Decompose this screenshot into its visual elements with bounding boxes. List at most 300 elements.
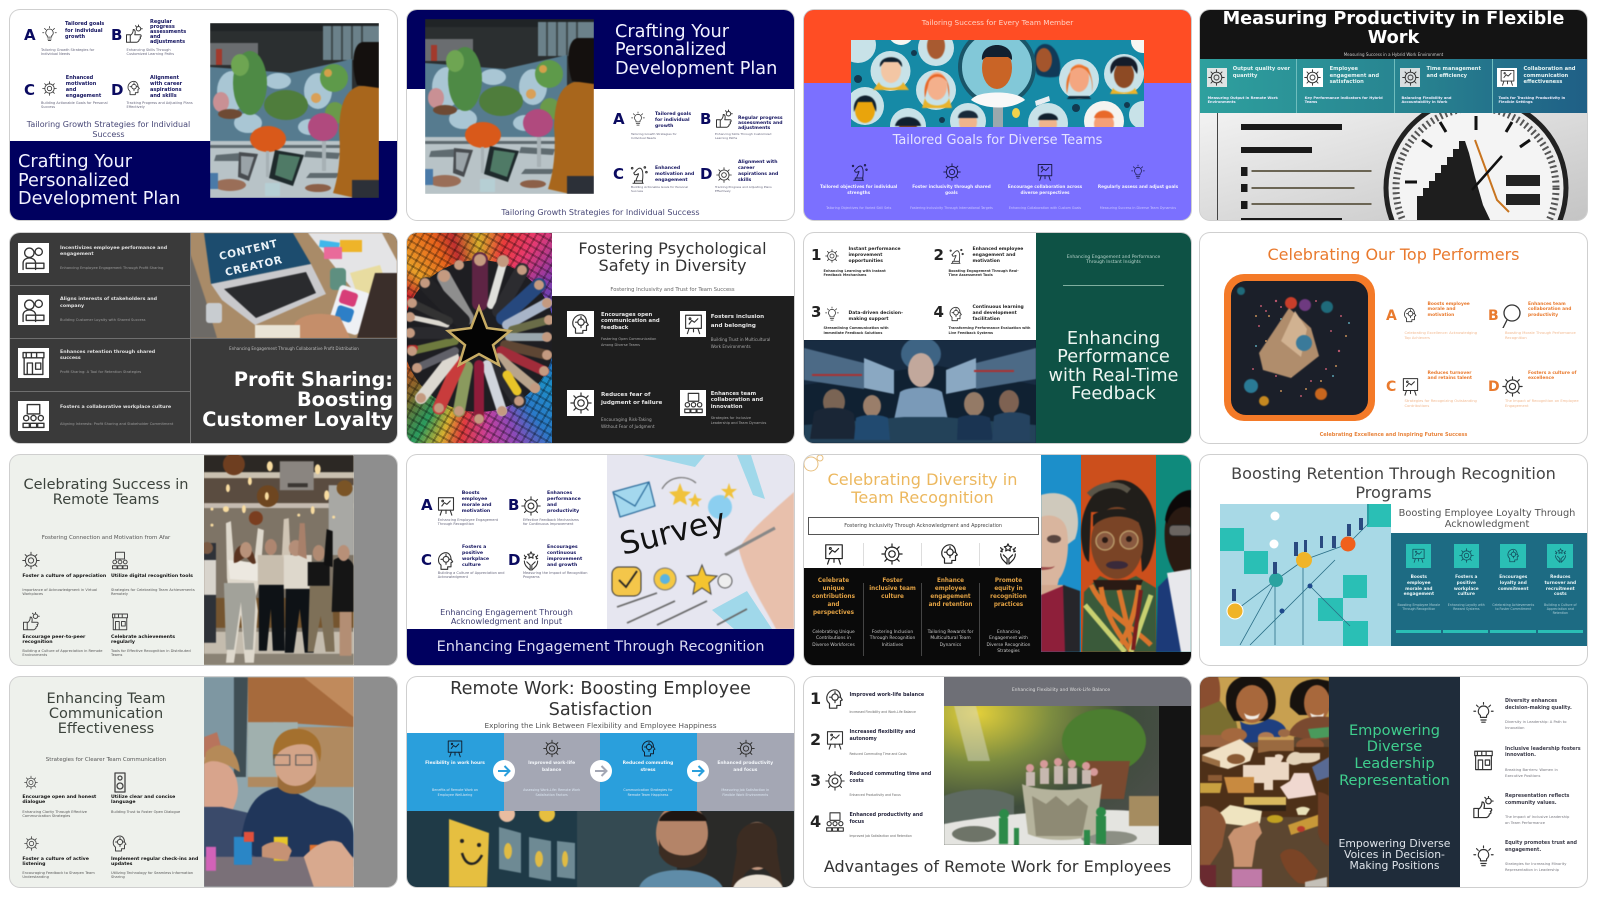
item A: Tailoring Growth Strategies for — [41, 48, 94, 52]
metric 3: and efficiency — [1426, 73, 1467, 79]
title — [1223, 10, 1564, 48]
item 2: Increased flexibility and — [850, 729, 915, 735]
subtitle: Acknowledgment — [1445, 519, 1529, 530]
icon: gear — [1502, 376, 1523, 396]
icon: gears — [1459, 548, 1474, 563]
column 4: Enhanced productivity — [717, 761, 773, 766]
icon: target gear — [943, 163, 961, 181]
item 4 — [810, 811, 940, 839]
column 2: goals — [945, 190, 958, 195]
item 3: 3 — [810, 771, 821, 790]
item 2: Enhanced employee — [972, 246, 1023, 252]
band title: Enhancing Engagement Through Recognition — [437, 639, 764, 655]
title: Enhancing Team — [47, 690, 165, 706]
photo: woman in helmet with holographic screens — [804, 340, 1036, 442]
item 1: 1 — [810, 689, 821, 708]
item B — [508, 491, 593, 529]
subtitle: Enhancing Engagement Through — [440, 606, 573, 616]
icon: gears — [543, 739, 561, 758]
item 3: Representation reflects — [1505, 793, 1569, 799]
column 1: employee — [1407, 581, 1431, 586]
item 1: Foster a culture of appreciation — [22, 574, 106, 578]
icon: lightbulb — [631, 112, 645, 126]
panel: Enhancing Performance with Real-Time Feedback — [804, 232, 1191, 442]
item 1 — [810, 691, 940, 717]
item 2: Reduced Commuting Time and Costs — [850, 752, 907, 756]
item B — [111, 19, 186, 56]
icon: easel — [682, 313, 704, 335]
item A: Individual Needs — [631, 136, 656, 140]
title: Celebrating Success in — [24, 476, 188, 492]
item C: and retains talent — [1428, 376, 1472, 381]
item 2: innovation. — [1505, 752, 1536, 758]
title — [18, 152, 180, 209]
icon: easel — [825, 730, 845, 750]
item 3: 3 — [811, 303, 821, 321]
item 2 — [810, 729, 940, 757]
item B: and — [150, 34, 161, 40]
item C: culture — [462, 563, 481, 568]
column 2: Reward Systems — [1453, 607, 1480, 611]
item D: Alignment with — [738, 160, 778, 165]
item A: growth — [65, 34, 85, 40]
item 4: Celebrate achievements — [111, 634, 175, 640]
title: Remote Teams — [53, 492, 159, 508]
item 3 — [810, 304, 910, 336]
item D: with career — [150, 81, 182, 87]
item C: Fosters a — [462, 545, 486, 550]
title: Enhancing — [1067, 328, 1160, 349]
item C: positive — [462, 551, 483, 556]
icon: magnifier — [1502, 304, 1523, 328]
title: Programs — [1355, 482, 1432, 502]
icon: head gear — [436, 550, 456, 572]
item 4 — [111, 833, 193, 883]
item 4: Representation in Leadership — [1505, 868, 1559, 872]
column 2 — [910, 163, 993, 210]
column 2: positive — [1457, 581, 1476, 586]
item 3: Foster a culture of active — [22, 856, 89, 862]
title: Customer Loyalty — [202, 408, 393, 431]
icon: chess knight — [948, 246, 964, 266]
subtitle: Fostering Inclusivity and Trust for Team Success — [610, 286, 735, 292]
column 4: equity in — [994, 586, 1023, 592]
column 4: Reduces — [1550, 575, 1570, 580]
item B — [700, 110, 783, 140]
column 1: perspectives — [813, 610, 854, 616]
title: Remote Work: Boosting Employee — [450, 679, 751, 699]
icon: lightbulb — [1473, 845, 1494, 868]
photo: survey paper and hand — [607, 455, 794, 629]
title: Crafting Your — [18, 152, 132, 172]
panel: Advantages of Remote Work for Employees — [804, 677, 1191, 887]
column 4 — [1098, 164, 1178, 210]
title: Celebrating Diversity in — [828, 470, 1017, 488]
column 4: Engagement with — [989, 636, 1028, 641]
item 3: Environments — [22, 653, 47, 657]
column 4: Promote — [995, 578, 1022, 584]
column 1: Boosts — [1411, 575, 1427, 580]
item B: Enhancing Skills Through — [126, 48, 171, 52]
item 2: Inclusive leadership fosters — [1505, 746, 1581, 752]
icon: speaker — [113, 772, 127, 793]
teal panel — [1391, 533, 1587, 646]
item B — [1487, 300, 1573, 342]
icon: gears — [1402, 69, 1419, 86]
metric 1: quantity — [1233, 73, 1257, 79]
metric 2: Employee — [1330, 66, 1358, 72]
item B: Enhancing Skills Through Customized — [715, 132, 771, 136]
item 4: Transforming Performance Evaluation with — [948, 326, 1030, 330]
item D: Tracking Progress and Adjusting Plans — [126, 101, 193, 105]
column 3: employee — [935, 586, 966, 592]
column 2: Satisfaction Factors — [535, 793, 568, 797]
item 4: Strategies for Increasing Minority — [1505, 862, 1566, 866]
column 4: Measuring Success in Diverse Team Dynamics — [1100, 206, 1176, 210]
metric 4: Flexible Settings — [1498, 100, 1533, 104]
item A: A — [24, 26, 36, 44]
item 4: Sharing — [111, 875, 125, 879]
item B: B — [700, 110, 711, 128]
column 3: Encourage collaboration across — [1008, 184, 1082, 189]
item D: The Impact of Recognition on Employee — [1505, 399, 1579, 403]
title — [804, 470, 1041, 508]
item C: Success — [631, 189, 643, 193]
panel: Enhancing Engagement Through Recognition — [407, 455, 794, 665]
column 3: Multicultural Team — [930, 636, 971, 641]
item B: Regular — [150, 19, 172, 25]
item 1: Increased Flexibility and Work-Life Balance — [850, 710, 916, 714]
item A: Boosts — [462, 491, 480, 496]
black header — [1200, 10, 1587, 59]
column 2: culture — [1458, 592, 1475, 597]
column 1: Benefits of Remote Work on — [432, 788, 478, 792]
title: Diverse — [1367, 738, 1422, 755]
item 3: making support — [848, 317, 889, 322]
item D: continuous — [547, 551, 576, 556]
item 3: Reduced commuting time and — [850, 770, 931, 776]
item 1: Encourages open — [601, 312, 652, 318]
item C — [613, 165, 694, 193]
column 1: Contributions in — [816, 636, 851, 641]
item C: engagement — [655, 178, 688, 183]
item 3: Streamlining Communication with — [824, 326, 888, 330]
icon: easel — [446, 739, 464, 758]
item A: motivation — [1428, 313, 1454, 318]
icon: head gear — [640, 739, 658, 758]
title — [1036, 330, 1191, 404]
item 4: engagement. — [1505, 847, 1541, 853]
photo: productivity chart and clock — [1200, 113, 1587, 220]
item 2: Executive Positions — [1505, 774, 1540, 778]
subtitle: Success — [92, 130, 125, 139]
item C: workplace — [462, 557, 489, 562]
item C: Building Actionable Goals for Personal — [41, 101, 108, 105]
photo: content creator laptop desk: CONTENT — [218, 237, 279, 262]
title: Team Recognition — [851, 488, 994, 507]
metric 4: communication — [1524, 73, 1568, 79]
item C: Reduces turnover — [1428, 370, 1471, 376]
item A: Tailored goals — [655, 112, 691, 117]
item 1: Communication Strategies — [22, 814, 70, 818]
column 2 — [1444, 543, 1491, 633]
title: Celebrating Our Top Performers — [1268, 244, 1520, 264]
item 2 — [932, 246, 1032, 278]
title — [10, 478, 202, 508]
title: Advantages of Remote Work for Employees — [824, 857, 1171, 876]
metric 3 — [1395, 59, 1493, 113]
title: Empowering — [1349, 722, 1440, 739]
panel: Tailored Goals for Diverse Teams — [804, 10, 1191, 220]
item 1: feedback — [601, 325, 628, 331]
grey header band — [944, 677, 1191, 706]
navy header band — [407, 10, 794, 89]
column 3: engagement — [930, 594, 971, 600]
item B: Customized Learning Paths — [126, 52, 174, 56]
item 1: Workplaces — [22, 592, 43, 596]
column 1: Through Recognition — [1402, 607, 1435, 611]
item 3: The Impact of Inclusive Leadership — [1505, 815, 1569, 819]
title: Development Plan — [615, 59, 777, 79]
column 2: Assessing Work-Life: Remote Work — [523, 788, 580, 792]
item A: Individual Needs — [41, 52, 70, 56]
item 3: recognition — [22, 640, 53, 645]
footer: Celebrating Excellence and Inspiring Future Success — [1320, 432, 1467, 438]
title — [407, 679, 794, 721]
subtitle: Acknowledgment and Input — [451, 616, 562, 626]
subtitle — [1391, 508, 1583, 531]
item D: Measuring the Impact of Recognition — [523, 571, 588, 575]
item C: Success — [41, 105, 55, 109]
icon: people board — [111, 550, 129, 571]
column 1: unique — [822, 586, 845, 592]
icon: clock gears — [521, 496, 541, 516]
column 4: practices — [994, 602, 1023, 608]
icon: head gear — [948, 304, 964, 324]
row 2: Aligns interests of stakeholders and — [60, 297, 157, 302]
item D: Effectively — [715, 189, 731, 193]
black lower panel — [804, 568, 1191, 665]
dark lower panel — [552, 296, 794, 442]
item 4: 4 — [810, 812, 821, 831]
item B: assessments and — [738, 120, 783, 126]
item 2: Building Trust to Foster Open Dialogue — [111, 810, 180, 814]
item A: A — [613, 110, 625, 128]
item A: morale and — [462, 503, 492, 508]
grey right strip — [354, 455, 397, 665]
item 4 — [1471, 840, 1583, 874]
item 2: Boosting Engagement Through Real- — [948, 269, 1019, 273]
subtitle box — [808, 517, 1039, 535]
item D: D — [1488, 378, 1500, 394]
metric 4: Tools for Tracking Productivity in — [1498, 96, 1565, 100]
item D: aspirations and — [738, 172, 778, 177]
item D: Encourages — [547, 545, 578, 550]
subtitle: Fostering Connection and Motivation from Afar — [42, 535, 170, 541]
row 3: Enhances retention through shared — [60, 350, 155, 354]
item C — [24, 75, 108, 109]
item D: career — [738, 166, 755, 171]
item C: Contributions — [1404, 404, 1429, 408]
icon: graduate head — [128, 80, 140, 96]
panel: Empowering Diverse Leadership Representation — [1200, 677, 1587, 887]
item 2: Building Trust in Multicultural — [711, 337, 770, 342]
metric 1: Measuring Output in Remote Work — [1208, 96, 1278, 100]
column 3: and retention — [929, 602, 972, 608]
item A: Top Achievers — [1404, 336, 1430, 340]
column 1: Celebrate — [818, 578, 849, 584]
icon: easel — [823, 542, 845, 566]
item 1: communication and — [601, 318, 660, 324]
panel: Celebrating Success in Remote Teams — [10, 455, 397, 665]
item 2: Work Environments — [711, 344, 751, 348]
item B: progress — [150, 24, 175, 30]
item 4: Improved Job Satisfaction and Retention — [850, 834, 912, 838]
item 3 — [22, 611, 104, 659]
panel: Celebrating Our Top Performers — [1200, 232, 1587, 442]
title — [202, 370, 393, 430]
item 1: dialogue — [22, 800, 45, 805]
item 4: Equity promotes trust and — [1505, 840, 1577, 846]
title: Satisfaction — [549, 700, 652, 720]
arrow 3 — [686, 759, 710, 783]
column 4 — [697, 733, 794, 811]
item A: Tailored goals — [65, 21, 104, 27]
column 3: Remote Team Happiness — [628, 793, 668, 797]
row 3: success — [60, 356, 81, 361]
item 1: Fostering Open Communication — [601, 337, 656, 341]
column 1 — [820, 164, 897, 210]
column 3: loyalty and — [1500, 581, 1527, 586]
item D: aspirations — [150, 87, 182, 93]
item A — [421, 491, 506, 529]
icon: people at desk — [22, 247, 45, 270]
arrow 2 — [588, 759, 612, 783]
item D: Programs — [523, 575, 540, 579]
item B: Learning Paths — [715, 136, 737, 140]
photo: digital garden and woman — [425, 19, 594, 194]
item A: for individual — [655, 118, 690, 123]
column 4: Diverse Recognition — [987, 643, 1030, 648]
item 3: community values. — [1505, 800, 1557, 806]
column 2: Through Recognition — [870, 636, 915, 641]
icon: easel — [1401, 374, 1420, 398]
icon: easel — [436, 496, 456, 516]
decorative circles — [804, 455, 828, 477]
item 1: Instant performance — [848, 246, 901, 252]
column 2: Fosters a — [1455, 575, 1477, 580]
photo: survey paper and hand: Survey — [616, 502, 729, 563]
item B: Enhances team — [1528, 302, 1566, 306]
icon: microphone gear — [24, 772, 38, 793]
item 1: improvement — [848, 253, 882, 258]
item 1 — [22, 772, 104, 822]
item 4: facilitation — [972, 317, 1000, 322]
navy title band — [10, 141, 397, 220]
column 1: Employee Well-being — [438, 793, 472, 797]
icon: graduate and buildings — [1473, 748, 1494, 770]
item B: for Continuous Improvement — [523, 522, 573, 526]
title: Personalized — [18, 171, 130, 191]
item C: Acknowledgment — [438, 575, 468, 579]
title: Effectiveness — [58, 721, 154, 737]
column 3: stress — [640, 768, 656, 773]
photo: circle of people with star on rainbow — [407, 232, 552, 442]
row 1: Incentivizes employee performance and — [60, 246, 167, 250]
item 1 — [567, 311, 672, 349]
item D: excellence — [1528, 376, 1554, 381]
column 2: workplace — [1454, 587, 1479, 592]
item 4 — [932, 304, 1032, 336]
column 3: Enhance — [937, 578, 964, 584]
item C — [1385, 370, 1465, 412]
subtitle: Through Instant Insights — [1086, 260, 1141, 265]
column 1: and — [828, 602, 839, 608]
icon: thumb — [716, 110, 733, 128]
item 4: focus — [850, 819, 864, 825]
item B: Regular progress — [738, 116, 783, 120]
row 4: Aligning Interests: Profit Sharing and Stakeholder Commitment — [60, 422, 173, 426]
item D: improvement — [547, 557, 582, 562]
item B: adjustments — [738, 126, 770, 130]
item 4 — [680, 390, 785, 428]
item D: Alignment — [150, 75, 179, 81]
metric 4: effectiveness — [1524, 79, 1562, 85]
row 2: Building Customer Loyalty with Shared Success — [60, 318, 146, 322]
icon: gear — [1208, 69, 1225, 86]
item D: and skills — [150, 93, 177, 99]
item 2: autonomy — [850, 736, 877, 742]
item 3: Enhanced Productivity and Focus — [850, 793, 901, 797]
icon: award — [42, 81, 57, 96]
title — [10, 692, 202, 737]
item B: B — [111, 26, 122, 44]
item 2: Breaking Barriers: Women in — [1505, 768, 1558, 772]
item 2: engagement and — [972, 253, 1015, 258]
item B: Effective Feedback Mechanisms — [523, 518, 579, 522]
title: Communication — [49, 706, 163, 722]
item 1: Enhancing Clarity Through Effective — [22, 810, 87, 814]
subtitle: Tailoring Success for Every Team Member — [922, 18, 1073, 27]
title: Performance — [1057, 346, 1170, 367]
item A — [1385, 300, 1465, 342]
metric 2: Key Performance Indicators for Hybrid — [1305, 96, 1383, 100]
item 3 — [22, 833, 104, 883]
item 1: Enhancing Learning with Instant — [824, 269, 886, 273]
item D: Tracking Progress and Adjusting Plans — [715, 185, 772, 189]
icon: thumbs up — [1472, 796, 1494, 819]
item B: productivity — [547, 509, 579, 514]
icon: chess knight — [630, 166, 648, 184]
item 4: and development — [972, 311, 1017, 316]
arrow 1 — [492, 759, 516, 783]
column 2: Initiatives — [882, 643, 903, 648]
item A — [24, 21, 104, 56]
column 1: contributions — [812, 594, 855, 600]
item 3: costs — [850, 778, 864, 784]
column 4: Enhancing — [997, 630, 1020, 635]
icon: gears head — [111, 833, 129, 854]
item 3: on Team Performance — [1505, 821, 1545, 825]
icon: thumb — [126, 24, 143, 43]
item 4: Implement regular check-ins and — [111, 856, 198, 862]
column 4 — [1538, 543, 1585, 633]
item C: motivation and — [655, 172, 694, 177]
icon: presentation chart — [682, 392, 704, 414]
item 1: Importance of Acknowledgment in Virtual — [22, 588, 97, 592]
item C: Strategies for Recognizing Outstanding — [1404, 399, 1477, 403]
item 1 — [810, 246, 910, 278]
